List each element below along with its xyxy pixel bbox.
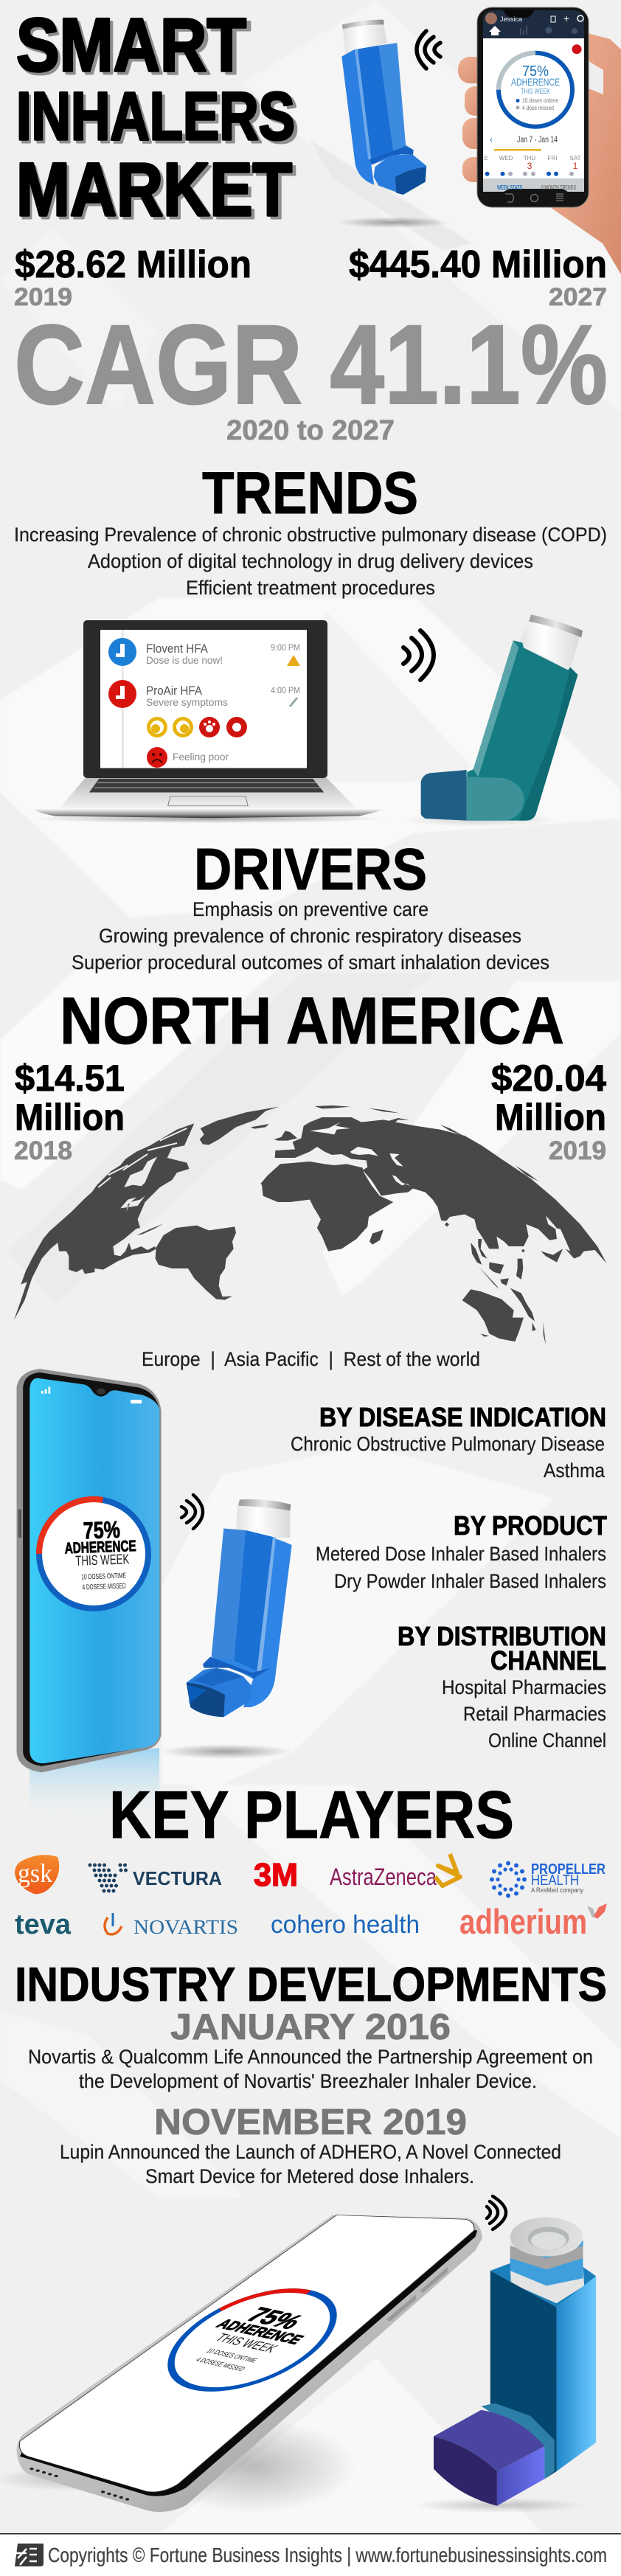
- footer logo: [15, 2544, 44, 2566]
- footer: [0, 2533, 621, 2576]
- calendar: WED: [499, 155, 513, 162]
- calendar: 3: [527, 161, 532, 171]
- Flovent reminder: 9:00 PM: [271, 642, 300, 653]
- icon: wireless signal segments: [181, 1495, 203, 1529]
- ProAir reminder: Severe symptoms: [146, 696, 228, 708]
- adherence text: THIS WEEK: [75, 1552, 130, 1569]
- development: January 2016: the Development of Novartis' Breezhaler Inhaler Device.: [79, 2070, 537, 2092]
- hand: [458, 33, 621, 274]
- Southeast Asian islands: [471, 1239, 563, 1344]
- phone footer: [483, 178, 584, 192]
- adherence text: 75%: [522, 63, 549, 80]
- canister: [510, 2238, 583, 2306]
- Greenland: [200, 1107, 279, 1145]
- stat: 2019 market value: $28.62 Million: [15, 243, 251, 286]
- icon: wireless signal trends: [403, 631, 434, 680]
- world map: [14, 1105, 607, 1344]
- title: Smart Inhalers Market: [16, 3, 299, 235]
- regions list: Europe | Asia Pacific | Rest of the world: [142, 1348, 480, 1370]
- phone screen: [19, 2215, 474, 2492]
- phone body: [477, 7, 589, 207]
- icon: wireless signal bottom: [487, 2196, 506, 2229]
- heading: North America: NORTH AMERICA: [60, 985, 564, 1058]
- phone screen: [30, 1378, 159, 1763]
- ProAir reminder: [108, 680, 300, 708]
- logo: Novartis: NOVARTIS: [133, 1916, 238, 1938]
- title: Smart Inhalers Market: SMART: [18, 6, 251, 90]
- feeling poor: Feeling poor: [173, 751, 229, 763]
- app header content: [485, 13, 583, 35]
- calendar: THU: [524, 155, 535, 162]
- adherence text: THIS WEEK: [521, 88, 550, 96]
- calendar: 6 MONTH TRENDS: [541, 184, 576, 191]
- trends list: [14, 524, 607, 599]
- calendar: ‹: [490, 134, 493, 145]
- development: January 2016: Novartis & Qualcomm Life Announced the Partnership Agreement on: [28, 2046, 593, 2068]
- stat: 2019 market value: [14, 243, 251, 311]
- Madagascar: [370, 1229, 384, 1245]
- heading: Key Players: KEY PLAYERS: [109, 1778, 514, 1853]
- ProAir reminder: 4:00 PM: [271, 685, 300, 695]
- trends list: Adoption of digital technology in drug delivery devices: [88, 550, 533, 572]
- collar: [481, 2403, 555, 2479]
- adherence ring: [36, 1496, 151, 1611]
- inland seas: [310, 1122, 570, 1251]
- stat: North America 2018: [14, 1058, 125, 1165]
- calendar: E: [484, 155, 488, 162]
- Flovent reminder: Flovent HFA: [146, 642, 209, 656]
- adherence text: 10 DOSES ONTIME: [81, 1572, 126, 1582]
- stat: North America 2018: $14.51: [15, 1058, 125, 1099]
- segment: by disease indication: [291, 1402, 606, 1482]
- development: November 2019: NOVEMBER 2019: [154, 2103, 467, 2142]
- phone bezel: [20, 2226, 477, 2496]
- symptom icons: [147, 717, 247, 737]
- icon: teal inhaler: [400, 614, 583, 827]
- heading: Drivers: DRIVERS: [194, 836, 427, 902]
- mouthpiece: [434, 2410, 544, 2471]
- adherence ring and text: THIS WEEK: [211, 2331, 281, 2355]
- adherence text: [63, 1516, 138, 1592]
- laptop lid: [83, 620, 327, 778]
- stat: 2027 market value: 2027: [549, 283, 607, 311]
- laptop screen: [100, 630, 307, 768]
- stat: 2019 market value: 2019: [14, 283, 72, 311]
- British Isles: [274, 1131, 297, 1141]
- phone nav bar: [505, 194, 563, 202]
- adherence text: 10 doses ontime: [522, 97, 558, 104]
- logo: gsk: [15, 1855, 59, 1894]
- body: [490, 2263, 596, 2307]
- icon: tilted smartphone: [0, 2215, 482, 2514]
- title: Smart Inhalers Market: MARKET: [16, 147, 292, 232]
- phone frame: [17, 1369, 162, 1772]
- stat: North America 2019: [491, 1058, 606, 1165]
- calendar: 1: [573, 161, 578, 171]
- trends list: Efficient treatment procedures: [186, 577, 435, 599]
- title: Smart Inhalers Market: INHALERS: [16, 79, 295, 154]
- drivers list: Emphasis on preventive care: [192, 898, 429, 920]
- development: November 2019: [60, 2103, 561, 2187]
- logo: Vectura: [90, 1865, 222, 1891]
- app header content: +: [563, 13, 569, 24]
- adherence ring and text: 4 DOSESE MISSED: [193, 2357, 246, 2372]
- heading: Trends: TRENDS: [202, 460, 418, 527]
- calendar: [484, 134, 581, 191]
- stat: North America 2019: Million: [495, 1097, 606, 1138]
- adherence text: 4 dose missed: [522, 105, 554, 111]
- stat: North America 2018: Million: [15, 1097, 125, 1138]
- logo: Teva: teva: [15, 1909, 72, 1940]
- logo: Propeller Health: A ResMed company: [531, 1886, 583, 1894]
- adherence ring and text: ADHERENCE: [212, 2316, 308, 2347]
- logo: Propeller Health: HEALTH: [531, 1872, 579, 1889]
- logo: Vectura: VECTURA: [133, 1867, 222, 1889]
- drivers list: [72, 898, 549, 973]
- Cuba: [136, 1223, 164, 1235]
- logo: Propeller Health: [490, 1861, 606, 1898]
- drivers list: Growing prevalence of chronic respiratory diseases: [99, 925, 521, 947]
- Flovent reminder: [108, 638, 300, 666]
- South America: [156, 1226, 236, 1300]
- stat: CAGR: 2020 to 2027: [226, 415, 395, 446]
- phone notch: [503, 10, 535, 18]
- development: November 2019: Smart Device for Metered dose Inhalers.: [145, 2165, 474, 2187]
- segment: by distribution channel: [398, 1621, 606, 1752]
- stat: 2027 market value: $445.40 Million: [349, 243, 607, 286]
- segment: by disease indication: Asthma: [544, 1459, 606, 1482]
- title: Smart Inhalers Market: SMART: [16, 3, 246, 87]
- Arctic inlets: [98, 1128, 187, 1187]
- Flovent reminder: Dose is due now!: [146, 654, 223, 666]
- stat: North America 2018: 2018: [14, 1136, 72, 1165]
- Eurasia and Oceania: [275, 1105, 607, 1344]
- adherence ring and text: 75%: [240, 2303, 309, 2333]
- app header content: Jessica: [500, 15, 522, 23]
- segment: by distribution channel: CHANNEL: [490, 1645, 606, 1676]
- Hudson Bay and Great Lakes: [120, 1156, 157, 1212]
- Africa: [260, 1162, 393, 1251]
- adherence ring and text: 10 DOSES ONTIME: [204, 2348, 259, 2364]
- title: Smart Inhalers Market: MARKET: [18, 150, 296, 235]
- segment: by distribution channel: Retail Pharmacies: [463, 1703, 606, 1725]
- feeling poor: [147, 747, 229, 768]
- adherence text: 4 DOSESE MISSED: [82, 1583, 126, 1592]
- calendar: WEEK STATS: [497, 184, 522, 191]
- icon: blue inhaler segments: [160, 1499, 293, 1759]
- segment: by product: [316, 1510, 607, 1592]
- icon: tall blue smartphone: [17, 1369, 162, 1825]
- phone reflection: [30, 1748, 159, 1825]
- stat: 2027 market value: [349, 243, 607, 311]
- logo: gsk: gsk: [18, 1858, 52, 1888]
- adherence text: ADHERENCE: [64, 1538, 136, 1557]
- logo: Adherium: adherium: [459, 1902, 587, 1941]
- calendar: FRI: [548, 155, 557, 162]
- logo: Cohero Health: cohero health: [271, 1911, 420, 1939]
- title: Smart Inhalers Market: INHALERS: [18, 82, 299, 157]
- logo: 3M: 3M: [254, 1857, 298, 1893]
- icon: isometric inhaler: [412, 2218, 596, 2513]
- adherence ring: [499, 53, 572, 127]
- ProAir reminder: ProAir HFA: [146, 684, 203, 698]
- calendar: SAT: [570, 155, 581, 162]
- Iceland: [251, 1124, 269, 1129]
- adherence text: [511, 63, 560, 111]
- development: January 2016: JANUARY 2016: [170, 2007, 451, 2047]
- Arctic islands: [315, 1105, 538, 1181]
- logo: Propeller Health: PROPELLER: [531, 1861, 606, 1878]
- development: November 2019: Lupin Announced the Launch of ADHERO, A Novel Connected: [60, 2141, 561, 2163]
- North America: [14, 1123, 194, 1320]
- adherence ring and text: [137, 2280, 367, 2400]
- adherence text: 75%: [83, 1516, 120, 1544]
- Americas and Atlantic land: [14, 1107, 393, 1320]
- Australia: [462, 1289, 524, 1341]
- calendar: Jan 7 - Jan 14: [517, 134, 558, 145]
- phone body: [17, 2215, 482, 2512]
- icon: wireless signal top: [417, 31, 440, 69]
- phone white screen: [483, 38, 584, 178]
- laptop base: [30, 778, 386, 823]
- stat: North America 2019: 2019: [549, 1136, 606, 1165]
- phone header: [483, 10, 584, 38]
- development: January 2016: [28, 2007, 593, 2092]
- adherence text: ADHERENCE: [511, 76, 560, 88]
- Sri Lanka and Hainan: [445, 1222, 525, 1252]
- alert badge: [572, 44, 581, 54]
- Eurasia: [275, 1117, 607, 1263]
- icon: hand holding smartphone: [458, 7, 621, 274]
- drivers list: Superior procedural outcomes of smart inhalation devices: [72, 951, 549, 973]
- logo: Novartis: [105, 1913, 238, 1938]
- logo: AstraZeneca: AstraZeneca: [330, 1864, 437, 1890]
- icon: laptop with dose reminders: [30, 620, 386, 823]
- segment: by distribution channel: Hospital Pharmacies: [442, 1676, 606, 1698]
- stat: North America 2019: $20.04: [491, 1058, 606, 1099]
- icon: blue inhaler top: [337, 20, 450, 228]
